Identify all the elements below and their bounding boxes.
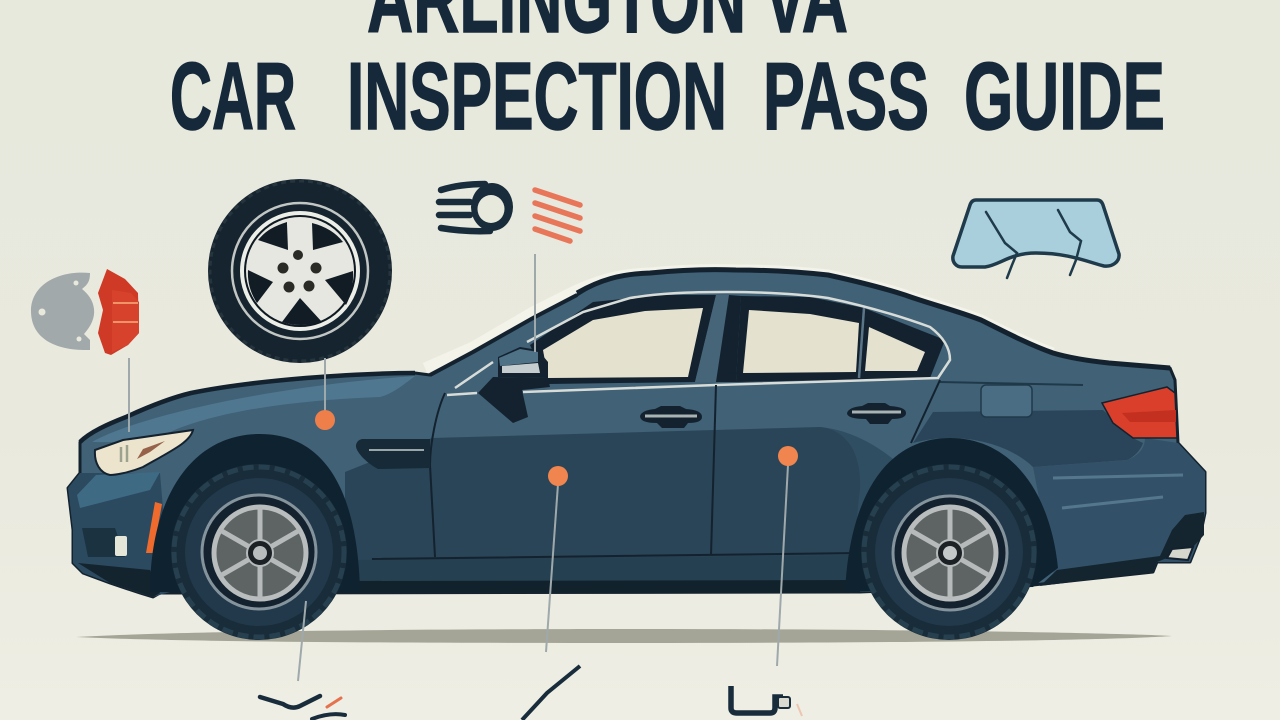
leader lines <box>129 254 788 681</box>
marker dot: rear door <box>778 446 798 466</box>
car body <box>68 270 1205 597</box>
hood highlight <box>92 376 415 442</box>
side mirror <box>478 347 550 423</box>
title: INSPECTION <box>347 43 727 150</box>
window divider <box>859 308 864 378</box>
front window glass <box>543 308 703 378</box>
orange side marker <box>146 502 162 553</box>
icon: bottom center wiper blade <box>522 666 580 720</box>
car light halo <box>425 270 1053 368</box>
front wheel <box>171 464 347 640</box>
side windows frame <box>530 295 716 384</box>
rear wheel arch <box>845 438 1058 592</box>
sill <box>350 555 860 592</box>
icon: bottom left squiggle <box>260 696 345 719</box>
taillight <box>1102 387 1177 438</box>
rear fender shade <box>820 427 905 592</box>
title: PASS <box>763 43 929 150</box>
character line <box>940 382 1083 385</box>
side vent <box>356 439 430 469</box>
chrome trim <box>523 292 950 392</box>
fog light <box>115 536 127 556</box>
icon: headlight <box>439 183 513 231</box>
icon: orange light beams <box>535 190 580 241</box>
car <box>68 270 1205 640</box>
rear bumper <box>1033 438 1205 580</box>
title: GUIDE <box>964 43 1165 150</box>
quarter window glass <box>865 327 925 371</box>
ground shadow <box>76 629 1172 643</box>
headlight <box>95 430 193 475</box>
title: CAR <box>170 43 296 150</box>
rear door handle <box>847 403 906 424</box>
b pillar <box>695 295 729 382</box>
marker dot: hood <box>315 410 335 430</box>
front wheel arch <box>150 434 360 592</box>
roof outline <box>430 295 577 375</box>
fuel door <box>981 385 1032 417</box>
exhaust <box>1167 547 1193 560</box>
marker dot: front door <box>548 466 568 486</box>
icon: brake disc and caliper <box>31 269 139 355</box>
front door handle <box>640 406 702 428</box>
rear window glass <box>743 310 859 373</box>
icon: bottom right gauge <box>731 686 802 716</box>
rear wheel <box>861 464 1037 640</box>
rear panel shade <box>913 410 1143 467</box>
lower door panel shade <box>345 427 860 592</box>
icon: windshield with wipers <box>953 200 1119 278</box>
title <box>170 0 1165 150</box>
front bumper <box>68 473 170 597</box>
door seams <box>372 380 940 559</box>
icon: tire and wheel <box>208 179 392 363</box>
